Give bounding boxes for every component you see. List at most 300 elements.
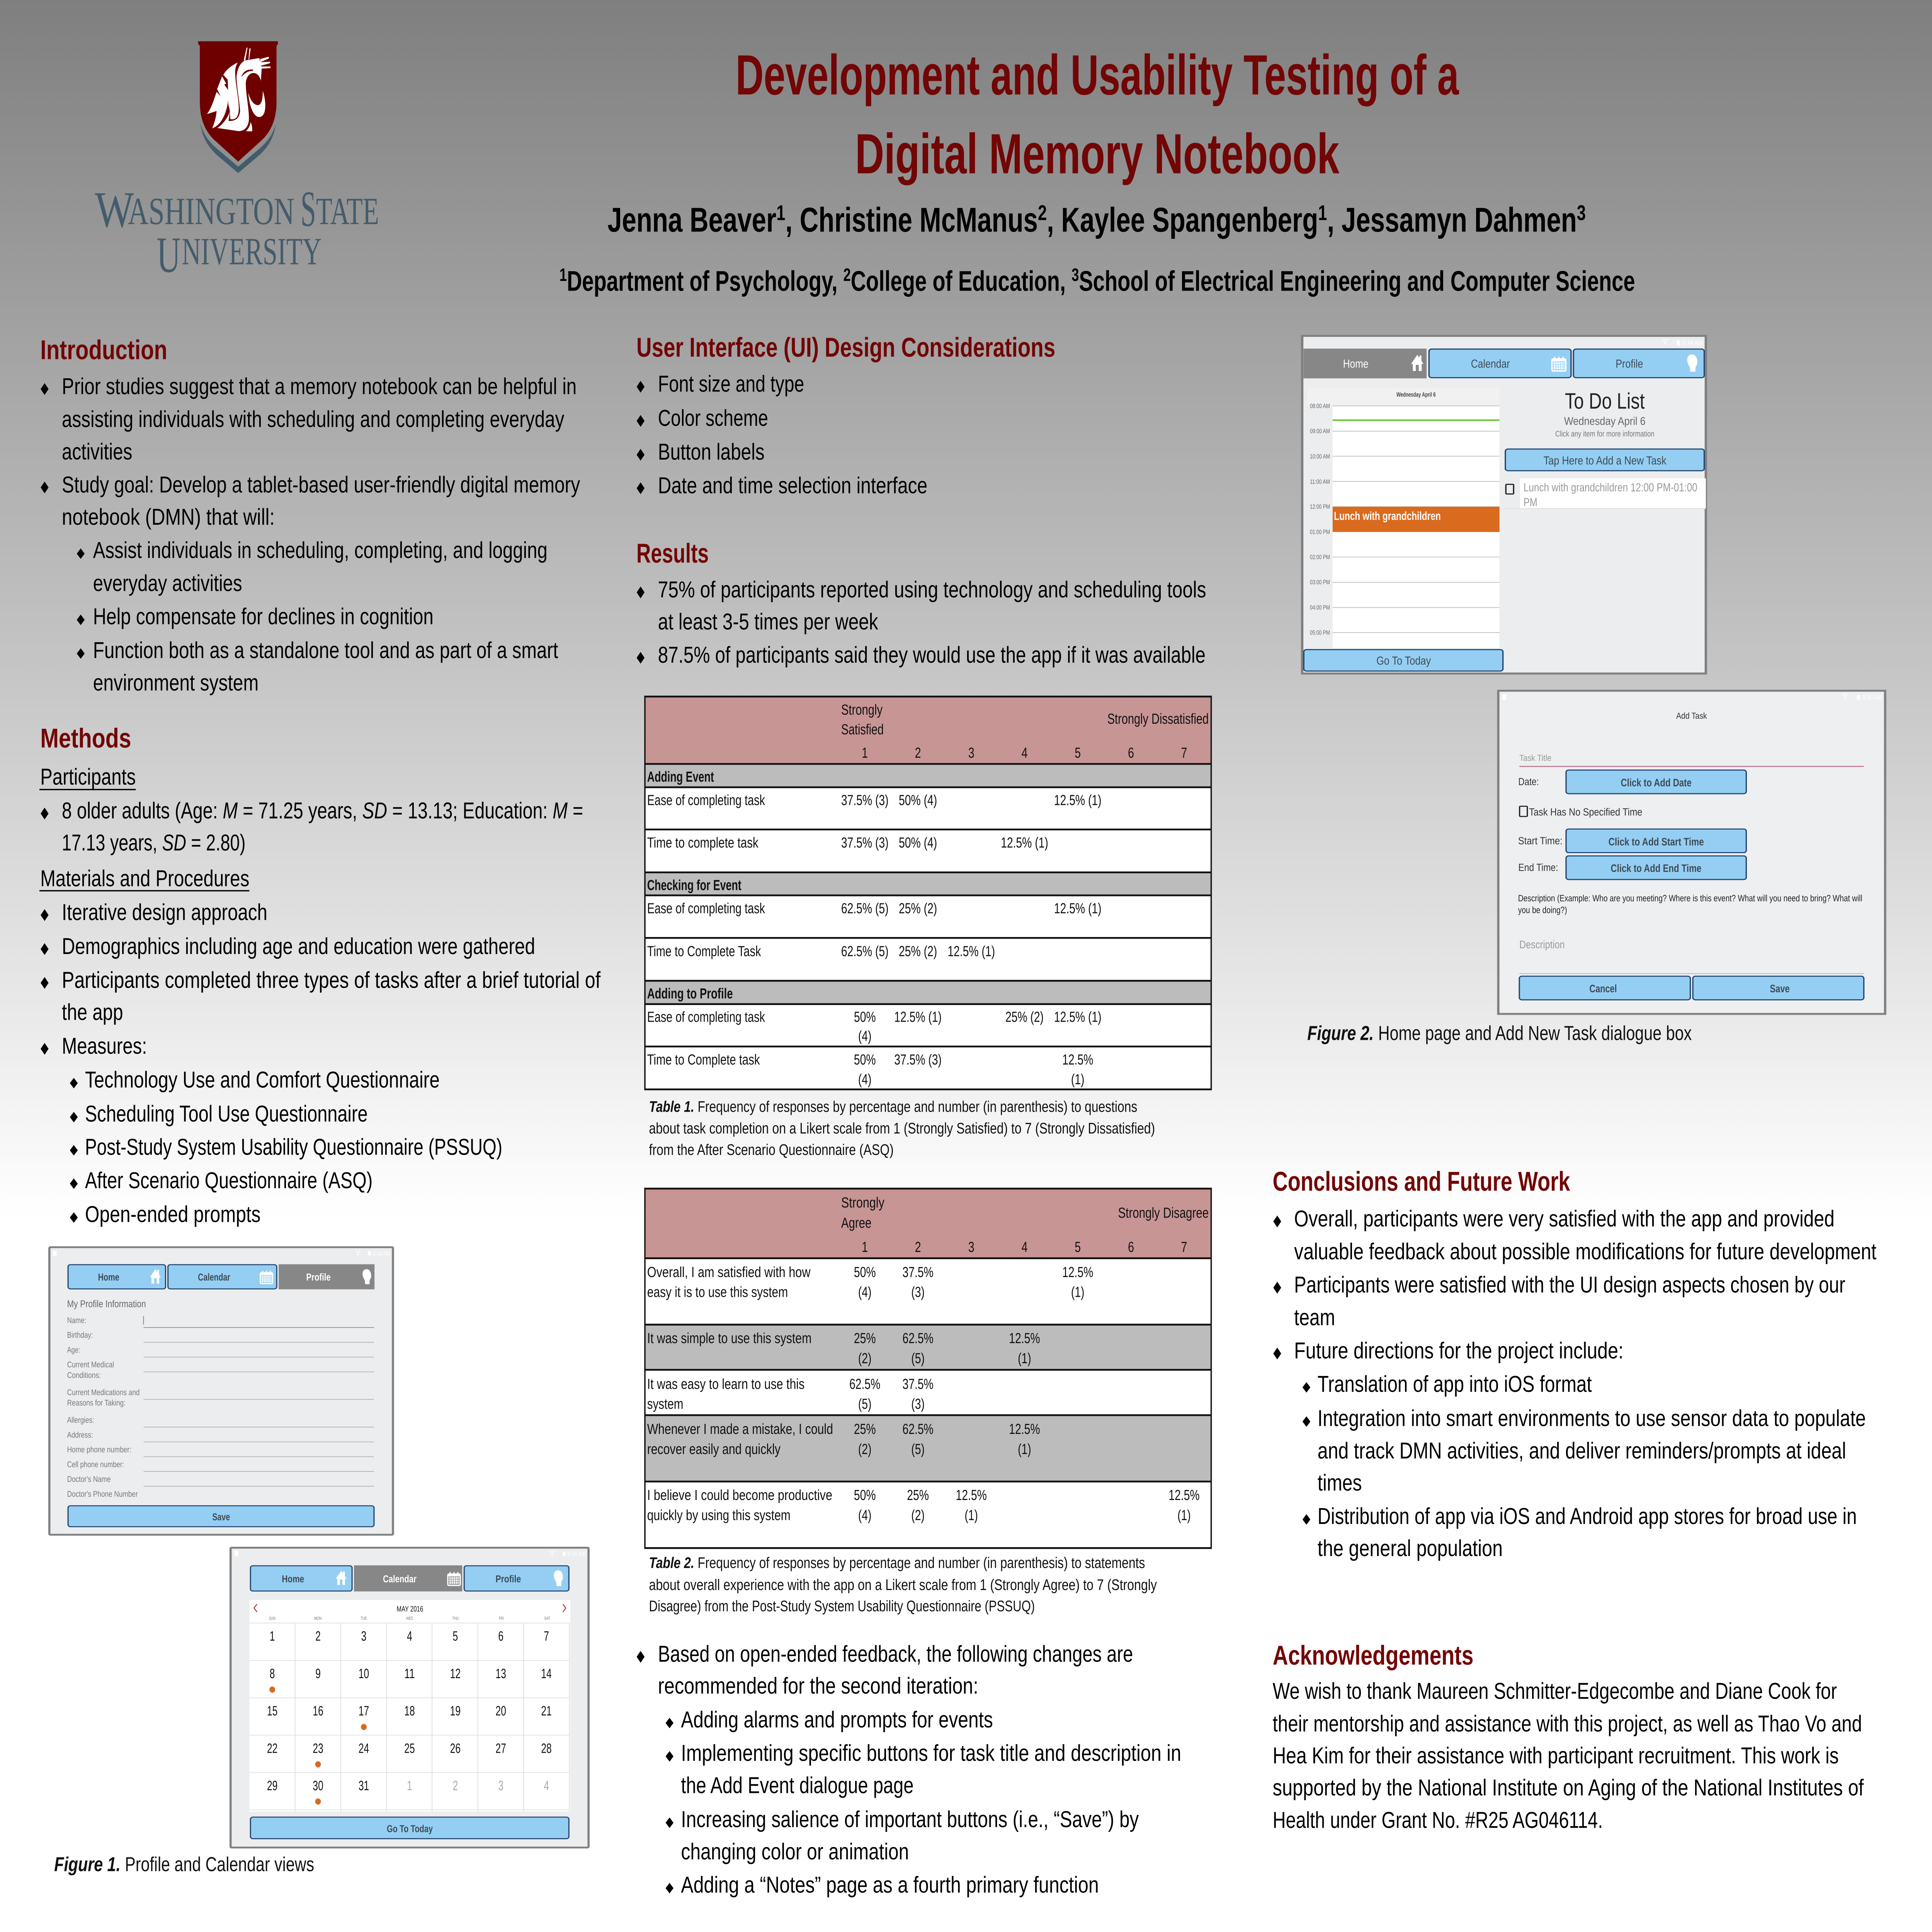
table 1: ASQ responses: 5 bbox=[1075, 745, 1081, 761]
table 2: PSSUQ responses: 12.5% bbox=[1062, 1264, 1094, 1281]
text block: materials and procedures bullets bbox=[41, 899, 601, 1227]
profile form: Cell phone number: bbox=[67, 1460, 124, 1469]
nav tabs: Calendar bbox=[383, 1573, 417, 1585]
month calendar: 8 bbox=[270, 1666, 275, 1681]
screenshot: add new task dialogue bbox=[1498, 691, 1885, 1014]
table 2: PSSUQ responses: easy it is to use this system bbox=[647, 1284, 788, 1300]
table 2: PSSUQ responses: 12.5% bbox=[956, 1487, 987, 1503]
subheading: materials and procedures: Materials and Procedures bbox=[40, 865, 249, 891]
affiliations: 3 bbox=[1071, 266, 1079, 286]
month calendar: FRI bbox=[499, 1616, 504, 1621]
wordmark: Washington State University: S bbox=[301, 180, 316, 237]
table 1: ASQ responses: 12.5% (1) bbox=[894, 1009, 942, 1025]
text block: conclusions bullets: Participants were satisfied with the UI design aspects chosen by our bbox=[1294, 1271, 1846, 1298]
month calendar: 26 bbox=[450, 1740, 461, 1756]
table 2: PSSUQ responses: (4) bbox=[858, 1284, 872, 1300]
day schedule: Lunch with grandchildren bbox=[1334, 510, 1441, 522]
table 1: ASQ responses: Ease of completing task bbox=[647, 792, 766, 808]
text block: acknowledgements: We wish to thank Maureen Schmitter-Edgecombe and Diane Cook for bbox=[1273, 1677, 1837, 1704]
nav tabs: Profile bbox=[496, 1573, 521, 1585]
text block: ui bullets: Color scheme bbox=[658, 405, 769, 431]
text block: conclusions bullets: the general population bbox=[1318, 1535, 1503, 1561]
month calendar: 2 bbox=[315, 1628, 321, 1644]
profile form: Conditions: bbox=[67, 1371, 101, 1380]
month calendar: WED bbox=[406, 1616, 413, 1621]
month calendar: 4 bbox=[407, 1628, 412, 1644]
text block: introduction bullets: environment system bbox=[93, 669, 259, 696]
task form bbox=[1518, 753, 1864, 974]
table 2: PSSUQ responses: system bbox=[647, 1396, 683, 1412]
affiliations: 2 bbox=[844, 266, 851, 286]
wordmark: Washington State University: W bbox=[95, 181, 135, 238]
affiliations: Department of Psychology, bbox=[567, 265, 844, 298]
table 1: ASQ responses: Ease of completing task bbox=[647, 900, 766, 917]
table 2: PSSUQ responses: (3) bbox=[911, 1396, 925, 1412]
table 1: ASQ responses: 6 bbox=[1128, 745, 1134, 761]
authors: Jenna Beaver bbox=[607, 202, 776, 240]
day schedule: 09:00 AM bbox=[1310, 427, 1330, 434]
profile form: Current Medical bbox=[67, 1360, 114, 1369]
authors: 1 bbox=[1318, 201, 1327, 225]
table 2: PSSUQ responses: Overall, I am satisfied with how bbox=[647, 1264, 811, 1281]
table 1: ASQ responses: 3 bbox=[968, 745, 975, 761]
screenshot: profile view bbox=[49, 1247, 393, 1535]
text block: ui bullets: Button labels bbox=[658, 438, 765, 464]
profile form: Name: bbox=[67, 1316, 86, 1325]
day schedule: 05:00 PM bbox=[1310, 629, 1330, 636]
text block: participants bullet bbox=[41, 797, 583, 855]
screenshot: add new task dialogue: 8:35 AM bbox=[1862, 694, 1882, 701]
table 2: PSSUQ responses: 7 bbox=[1181, 1239, 1187, 1255]
table 1: ASQ responses: 50% (4) bbox=[899, 792, 937, 808]
text block: recommended changes: changing color or animation bbox=[681, 1838, 909, 1864]
wordmark: Washington State University: NIVERSITY bbox=[182, 231, 321, 274]
authors: 3 bbox=[1577, 201, 1586, 225]
to do list: Lunch with grandchildren 12:00 PM-01:00 bbox=[1524, 481, 1697, 494]
table 1: ASQ responses: Adding to Profile bbox=[647, 985, 733, 1002]
table 2: PSSUQ responses: 3 bbox=[968, 1239, 975, 1255]
table 1: ASQ responses: 4 bbox=[1022, 745, 1028, 761]
profile form: Birthday: bbox=[67, 1331, 93, 1340]
month calendar: 15 bbox=[267, 1703, 277, 1718]
table 1: ASQ responses: 2 bbox=[915, 745, 921, 761]
month calendar: 7 bbox=[544, 1628, 549, 1644]
month calendar: 19 bbox=[450, 1703, 461, 1718]
task form: Start Time: bbox=[1518, 835, 1563, 847]
text block: materials and procedures bullets: Technology Use and Comfort Questionnaire bbox=[85, 1066, 440, 1092]
month calendar: 5 bbox=[453, 1628, 458, 1644]
table 2: PSSUQ responses: 62.5% bbox=[849, 1376, 881, 1392]
table 1: ASQ responses: Strongly bbox=[841, 701, 883, 718]
caption: figure 2: Figure 2. Home page and Add New Task dialogue box bbox=[1307, 1022, 1693, 1045]
nav tabs bbox=[68, 1264, 374, 1289]
table 1: ASQ responses: 25% (2) bbox=[899, 943, 937, 959]
table 2: PSSUQ responses: 6 bbox=[1128, 1239, 1134, 1255]
to do list: Click any item for more information bbox=[1555, 429, 1654, 438]
table 2: PSSUQ responses: 12.5% bbox=[1168, 1487, 1200, 1503]
table 1: ASQ responses: (4) bbox=[858, 1028, 872, 1044]
table 2: PSSUQ responses: 50% bbox=[854, 1487, 876, 1503]
table 2: PSSUQ responses: (1) bbox=[964, 1507, 978, 1524]
table 2: PSSUQ responses: (1) bbox=[1071, 1284, 1085, 1300]
table 2: PSSUQ responses: 25% bbox=[854, 1330, 876, 1347]
screenshot: calendar view bbox=[231, 1548, 588, 1847]
month calendar: 14 bbox=[541, 1666, 552, 1681]
text block: introduction bullets: Help compensate for declines in cognition bbox=[93, 603, 434, 629]
day schedule: 01:00 PM bbox=[1310, 528, 1330, 535]
text block: acknowledgements: Health under Grant No. #R25 AG046114. bbox=[1273, 1806, 1603, 1833]
logo: Washington State University bbox=[95, 41, 379, 283]
table 2: PSSUQ responses: (2) bbox=[911, 1507, 925, 1524]
table 2: PSSUQ responses: 2 bbox=[915, 1239, 921, 1255]
nav tabs: Home bbox=[282, 1573, 304, 1585]
heading: introduction: Introduction bbox=[40, 335, 167, 366]
to do list: Wednesday April 6 bbox=[1564, 415, 1646, 427]
text block: materials and procedures bullets: Participants completed three types of tasks after a brief tutorial of bbox=[62, 966, 601, 993]
month calendar bbox=[250, 1600, 570, 1811]
table 2: PSSUQ responses: (1) bbox=[1018, 1350, 1031, 1367]
panel: introduction bbox=[40, 335, 580, 696]
authors: , Kaylee Spangenberg bbox=[1047, 202, 1318, 240]
month calendar: 20 bbox=[496, 1703, 506, 1718]
table 2: PSSUQ responses: 50% bbox=[854, 1264, 876, 1281]
text block: materials and procedures bullets: Post-Study System Usability Questionnaire (PSSUQ) bbox=[85, 1133, 502, 1160]
table 2: PSSUQ responses: 1 bbox=[862, 1239, 868, 1255]
month calendar: SAT bbox=[544, 1616, 550, 1621]
text block: introduction bullets: notebook (DMN) that will: bbox=[62, 503, 275, 530]
month calendar: 18 bbox=[404, 1703, 415, 1718]
task form: Date: bbox=[1518, 776, 1539, 787]
caption: table 1: about task completion on a Likert scale from 1 (Strongly Satisfied) to 7 (Strongly Dissatisfied) bbox=[649, 1119, 1155, 1137]
day schedule: 03:00 PM bbox=[1310, 579, 1330, 586]
month calendar: 9 bbox=[315, 1666, 321, 1681]
day schedule: 08:00 AM bbox=[1310, 403, 1330, 410]
caption: table 2 bbox=[649, 1553, 1157, 1615]
go to today button: Go To Today bbox=[1376, 654, 1431, 667]
text block: participants bullet: 8 older adults (Age: M = 71.25 years, SD = 13.13; Education: M = bbox=[62, 797, 583, 823]
task form: Description bbox=[1519, 939, 1565, 951]
table 1: ASQ responses: Satisfied bbox=[841, 721, 884, 738]
table 1: ASQ responses: 50% bbox=[854, 1051, 876, 1068]
table 2: PSSUQ responses: Agree bbox=[841, 1214, 872, 1231]
wordmark: Washington State University: TATE bbox=[316, 191, 379, 234]
table 2: PSSUQ responses: Strongly Disagree bbox=[1118, 1204, 1209, 1221]
table 1: ASQ responses: Time to Complete task bbox=[647, 1051, 760, 1068]
authors: , Jessamyn Dahmen bbox=[1327, 202, 1577, 240]
day schedule: 11:00 AM bbox=[1310, 478, 1330, 485]
table 1: ASQ responses: Checking for Event bbox=[647, 877, 742, 893]
day schedule: 10:00 AM bbox=[1310, 453, 1330, 460]
task form: End Time: bbox=[1518, 862, 1558, 873]
text block: conclusions bullets: valuable feedback about possible modifications for future development bbox=[1294, 1238, 1877, 1264]
screenshot: home page bbox=[1302, 336, 1706, 673]
authors: 2 bbox=[1038, 201, 1047, 225]
text block: conclusions bullets: Overall, participants were very satisfied with the app and provided bbox=[1294, 1205, 1835, 1231]
table 1: ASQ responses: (1) bbox=[1071, 1071, 1085, 1088]
table 2: PSSUQ responses: 62.5% bbox=[903, 1421, 934, 1437]
text block: ui bullets: Font size and type bbox=[658, 370, 804, 396]
table 2: PSSUQ responses: 25% bbox=[907, 1487, 929, 1503]
heading: acknowledgements: Acknowledgements bbox=[1273, 1640, 1473, 1671]
month calendar: 1 bbox=[407, 1778, 412, 1793]
to do list: PM bbox=[1524, 496, 1537, 509]
task form: Click to Add Start Time bbox=[1609, 836, 1704, 848]
profile form: Doctor's Name bbox=[67, 1475, 111, 1484]
caption: table 2: Table 2. Frequency of responses by percentage and number (in parenthesis) to statements bbox=[649, 1553, 1145, 1571]
table 1: ASQ responses: 12.5% (1) bbox=[1001, 834, 1048, 851]
table 2: PSSUQ responses: (2) bbox=[858, 1350, 872, 1367]
table 2: PSSUQ responses: 25% bbox=[854, 1421, 876, 1437]
screenshot: calendar view: 8:34 AM bbox=[568, 1551, 586, 1557]
table 2: PSSUQ responses: (3) bbox=[911, 1284, 925, 1300]
text block: introduction bullets: Prior studies suggest that a memory notebook can be helpful in bbox=[62, 373, 577, 399]
table 2: PSSUQ responses: 37.5% bbox=[903, 1376, 934, 1392]
table 2: PSSUQ responses: It was easy to learn to use this bbox=[647, 1376, 805, 1392]
title: Digital Memory Notebook bbox=[855, 124, 1340, 187]
month calendar: 29 bbox=[267, 1778, 277, 1793]
table 2: PSSUQ responses bbox=[645, 1189, 1211, 1548]
text block: materials and procedures bullets: the app bbox=[62, 998, 123, 1025]
text block: conclusions bullets: team bbox=[1294, 1304, 1335, 1330]
table 2: PSSUQ responses: I believe I could become productive bbox=[647, 1487, 832, 1503]
caption: table 1 bbox=[649, 1097, 1155, 1158]
month calendar: 6 bbox=[498, 1628, 503, 1644]
month calendar: 11 bbox=[404, 1666, 415, 1681]
text block: results bullets: at least 3-5 times per week bbox=[658, 608, 879, 634]
month calendar: 16 bbox=[313, 1703, 323, 1718]
text block: introduction bullets: Study goal: Develop a tablet-based user-friendly digital memory bbox=[62, 471, 580, 497]
table 2: PSSUQ responses: (5) bbox=[911, 1441, 925, 1457]
text block: recommended changes: Adding alarms and prompts for events bbox=[681, 1706, 993, 1732]
text block: results bullets bbox=[637, 576, 1206, 668]
text block: results bullets: 87.5% of participants said they would use the app if it was available bbox=[658, 641, 1206, 668]
nav tabs bbox=[250, 1565, 569, 1592]
profile form: Current Medications and bbox=[67, 1388, 140, 1397]
cancel and save buttons: Cancel bbox=[1589, 983, 1617, 995]
profile form: Allergies: bbox=[67, 1416, 94, 1425]
table 1: ASQ responses: 1 bbox=[862, 745, 868, 761]
table 2: PSSUQ responses: (1) bbox=[1018, 1441, 1031, 1457]
table 1: ASQ responses: 25% (2) bbox=[1005, 1009, 1044, 1025]
go to today button: Go To Today bbox=[387, 1823, 433, 1834]
table 2: PSSUQ responses: recover easily and quickly bbox=[647, 1441, 781, 1457]
table 1: ASQ responses: Ease of completing task bbox=[647, 1009, 766, 1025]
table 1: ASQ responses: 37.5% (3) bbox=[841, 792, 889, 808]
month calendar: 31 bbox=[359, 1778, 369, 1793]
table 2: PSSUQ responses: Strongly bbox=[841, 1194, 885, 1211]
icon: WSU shield with cougar head bbox=[198, 41, 278, 173]
day schedule: 02:00 PM bbox=[1310, 553, 1330, 560]
text block: introduction bullets: assisting individuals with scheduling and completing everyday bbox=[62, 406, 564, 432]
table 1: ASQ responses: Strongly Dissatisfied bbox=[1107, 711, 1209, 727]
month calendar: 30 bbox=[313, 1778, 323, 1793]
panel: conclusions and future work bbox=[1273, 1166, 1877, 1561]
table 2: PSSUQ responses: 62.5% bbox=[903, 1330, 934, 1347]
nav tabs: Calendar bbox=[198, 1272, 230, 1283]
month calendar: 17 bbox=[359, 1703, 369, 1718]
day schedule: 04:00 PM bbox=[1310, 604, 1330, 611]
nav tabs: Calendar bbox=[1471, 357, 1510, 370]
month calendar: TUE bbox=[361, 1616, 367, 1621]
heading: conclusions: Conclusions and Future Work bbox=[1273, 1166, 1571, 1197]
table 1: ASQ responses: 37.5% (3) bbox=[894, 1051, 942, 1068]
table 1: ASQ responses: 50% (4) bbox=[899, 834, 937, 851]
screenshot: profile view: 8:34 AM bbox=[373, 1250, 390, 1257]
table 2: PSSUQ responses: quickly by using this system bbox=[647, 1507, 791, 1524]
text block: conclusions bullets: Translation of app into iOS format bbox=[1318, 1371, 1592, 1397]
panel: methods bbox=[39, 723, 601, 1227]
caption: table 1: Table 1. Frequency of responses by percentage and number (in parenthesis) to questions bbox=[649, 1097, 1138, 1115]
table 1: ASQ responses: 62.5% (5) bbox=[841, 900, 889, 917]
profile form: Home phone number: bbox=[67, 1445, 131, 1454]
table 1: ASQ responses: 12.5% (1) bbox=[1054, 792, 1102, 808]
cancel and save buttons: Save bbox=[1770, 983, 1790, 995]
month calendar: SUN bbox=[269, 1616, 276, 1621]
table 2: PSSUQ responses: 12.5% bbox=[1009, 1330, 1040, 1347]
month calendar: 23 bbox=[313, 1740, 323, 1756]
subheading: participants: Participants bbox=[40, 763, 136, 789]
text block: conclusions bullets: and track DMN activities, and deliver reminders/prompts at ideal bbox=[1318, 1437, 1846, 1463]
month calendar: 12 bbox=[450, 1666, 461, 1681]
text block: recommended changes: Implementing specific buttons for task title and description in bbox=[681, 1740, 1181, 1766]
wordmark: Washington State University: ASHINGTON bbox=[128, 191, 294, 234]
text block: ui bullets: Date and time selection interface bbox=[658, 472, 928, 498]
month calendar: 28 bbox=[541, 1740, 552, 1756]
month calendar: 10 bbox=[359, 1666, 369, 1681]
to do list: Tap Here to Add a New Task bbox=[1544, 454, 1667, 467]
month calendar: 25 bbox=[404, 1740, 415, 1756]
text block: materials and procedures bullets: Scheduling Tool Use Questionnaire bbox=[85, 1100, 368, 1126]
profile form: Age: bbox=[67, 1345, 80, 1354]
text block: introduction bullets: Assist individuals in scheduling, completing, and logging bbox=[93, 537, 548, 563]
title: Development and Usability Testing of a bbox=[736, 45, 1460, 107]
text block: materials and procedures bullets: After Scenario Questionnaire (ASQ) bbox=[85, 1167, 372, 1193]
task form: Click to Add Date bbox=[1621, 777, 1692, 789]
table 1: ASQ responses: 62.5% (5) bbox=[841, 943, 889, 959]
text block: recommended changes bbox=[637, 1640, 1181, 1898]
day schedule: Wednesday April 6 bbox=[1396, 391, 1436, 398]
text block: introduction bullets: everyday activities bbox=[93, 570, 242, 596]
task form: Click to Add End Time bbox=[1611, 862, 1701, 874]
caption: table 1: from the After Scenario Questionnaire (ASQ) bbox=[649, 1140, 894, 1158]
nav tabs: Profile bbox=[306, 1272, 331, 1283]
to do list: To Do List bbox=[1565, 388, 1645, 413]
affiliations: School of Electrical Engineering and Computer Science bbox=[1079, 265, 1636, 298]
panel: acknowledgements bbox=[1273, 1640, 1864, 1833]
table 2: PSSUQ responses: 4 bbox=[1022, 1239, 1028, 1255]
authors: , Christine McManus bbox=[785, 202, 1038, 240]
panel: results bbox=[636, 538, 1206, 668]
month calendar: THU bbox=[452, 1616, 459, 1621]
month calendar: 27 bbox=[496, 1740, 506, 1756]
task form: you be doing?) bbox=[1518, 905, 1567, 915]
profile form: Reasons for Taking: bbox=[67, 1398, 126, 1407]
text block: recommended changes: recommended for the second iteration: bbox=[658, 1672, 978, 1699]
caption: figure 1: Figure 1. Profile and Calendar views bbox=[54, 1853, 314, 1876]
text block: participants bullet: 17.13 years, SD = 2.80) bbox=[62, 829, 246, 855]
text block: acknowledgements: their mentorship and assistance with this project, as well as Thao Vo and bbox=[1273, 1710, 1862, 1736]
table 1: ASQ responses: 37.5% (3) bbox=[841, 834, 889, 851]
month calendar: 13 bbox=[496, 1666, 506, 1681]
wordmark: Washington State University: U bbox=[157, 226, 180, 283]
table 2: PSSUQ responses: (4) bbox=[858, 1507, 872, 1524]
text block: introduction bullets: activities bbox=[62, 438, 132, 464]
month calendar: MON bbox=[314, 1616, 321, 1621]
task form: Task Has No Specified Time bbox=[1529, 806, 1642, 818]
text block: conclusions bullets bbox=[1273, 1205, 1877, 1561]
title bbox=[736, 45, 1460, 187]
text block: recommended changes: Adding a “Notes” page as a fourth primary function bbox=[681, 1871, 1099, 1898]
nav tabs: Home bbox=[1343, 357, 1368, 370]
profile form bbox=[67, 1299, 374, 1498]
table 2: PSSUQ responses: 12.5% bbox=[1009, 1421, 1040, 1437]
nav tabs: Home bbox=[98, 1272, 119, 1283]
text block: materials and procedures bullets: Demographics including age and education were gathered bbox=[62, 933, 535, 959]
text block: materials and procedures bullets: Open-ended prompts bbox=[85, 1201, 260, 1227]
table 2: PSSUQ responses: 37.5% bbox=[903, 1264, 934, 1281]
day schedule: 12:00 PM bbox=[1310, 503, 1330, 510]
table 1: ASQ responses: 7 bbox=[1181, 745, 1187, 761]
text block: recommended changes: Increasing salience of important buttons (i.e., “Save”) by bbox=[681, 1806, 1139, 1832]
table 1: ASQ responses: 50% bbox=[854, 1009, 876, 1025]
month calendar: 4 bbox=[544, 1778, 549, 1793]
month calendar: 22 bbox=[267, 1740, 277, 1756]
text block: conclusions bullets: times bbox=[1318, 1469, 1362, 1495]
month calendar: 21 bbox=[541, 1703, 552, 1718]
month calendar: 3 bbox=[361, 1628, 366, 1644]
month calendar: 2 bbox=[453, 1778, 458, 1793]
text block: ui bullets bbox=[637, 370, 928, 498]
month calendar: MAY 2016 bbox=[396, 1605, 423, 1613]
table 1: ASQ responses: (4) bbox=[858, 1071, 872, 1088]
go to today button bbox=[250, 1817, 569, 1839]
caption: table 2: about overall experience with the app on a Likert scale from 1 (Strongly Agree) to 7 (Strongly bbox=[649, 1575, 1157, 1593]
text block: recommended changes: Based on open-ended feedback, the following changes are bbox=[658, 1640, 1133, 1667]
table 2: PSSUQ responses: (5) bbox=[858, 1396, 872, 1412]
nav tabs: Profile bbox=[1616, 357, 1643, 370]
authors: 1 bbox=[776, 201, 785, 225]
table 1: ASQ responses: Time to Complete Task bbox=[647, 943, 762, 959]
text block: acknowledgements: supported by the National Institute on Aging of the National Institutes of bbox=[1273, 1774, 1864, 1800]
table 1: ASQ responses bbox=[645, 697, 1211, 1089]
heading: ui design considerations: User Interface (UI) Design Considerations bbox=[636, 332, 1055, 363]
month calendar: 1 bbox=[270, 1628, 275, 1644]
table 1: ASQ responses: Adding Event bbox=[647, 769, 714, 785]
screenshot: home page: 8:34 AM bbox=[1682, 339, 1703, 347]
text block: acknowledgements: Hea Kim for their assistance with participant recruitment. This work is bbox=[1273, 1742, 1839, 1769]
affiliations: College of Education, bbox=[851, 265, 1071, 298]
text block: materials and procedures bullets: Iterative design approach bbox=[62, 899, 267, 925]
text block: conclusions bullets: Distribution of app via iOS and Android app stores for broad use in bbox=[1318, 1503, 1857, 1529]
to do list bbox=[1504, 388, 1706, 509]
table 2: PSSUQ responses: 5 bbox=[1075, 1239, 1081, 1255]
profile form: My Profile Information bbox=[67, 1299, 146, 1310]
day schedule bbox=[1307, 388, 1500, 648]
month calendar: 24 bbox=[359, 1740, 369, 1756]
go to today button bbox=[1304, 650, 1503, 671]
text block: recommended changes: the Add Event dialogue page bbox=[681, 1772, 914, 1798]
table 2: PSSUQ responses: (1) bbox=[1177, 1507, 1191, 1524]
table 1: ASQ responses: Time to complete task bbox=[647, 834, 759, 851]
panel: user interface design considerations bbox=[636, 332, 1055, 498]
table 2: PSSUQ responses: (5) bbox=[911, 1350, 925, 1367]
affiliations: 1 bbox=[560, 266, 567, 286]
profile form: Address: bbox=[67, 1430, 93, 1439]
table 2: PSSUQ responses: It was simple to use this system bbox=[647, 1330, 811, 1347]
cancel and save buttons bbox=[1519, 976, 1864, 1000]
table 1: ASQ responses: 12.5% (1) bbox=[1054, 1009, 1102, 1025]
table 1: ASQ responses: 12.5% (1) bbox=[947, 943, 995, 959]
